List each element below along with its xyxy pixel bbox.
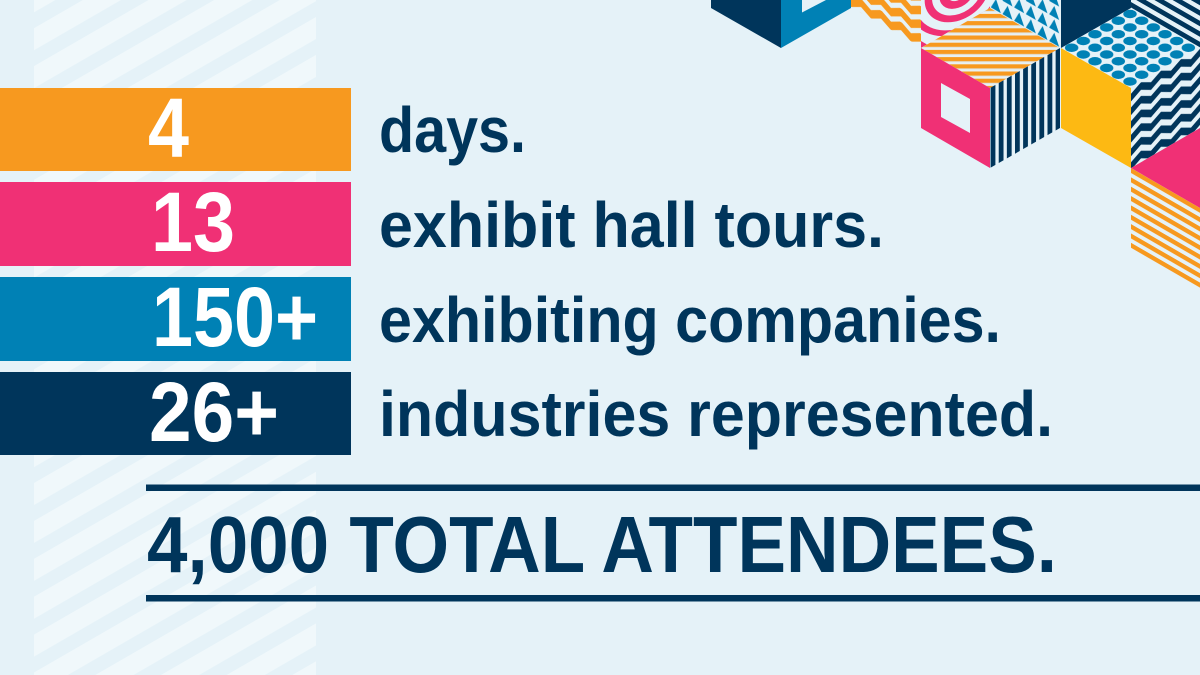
cube: blue dots, yellow and navy waves: [1061, 8, 1200, 168]
face: pink concentric rings: [921, 0, 990, 48]
label: exhibiting companies.: [379, 284, 1001, 356]
stat row: 150+ exhibiting companies: [0, 270, 1001, 364]
orange bar: [0, 88, 351, 171]
label: industries represented.: [379, 378, 1053, 450]
cube: pink, orange and navy stripes: [921, 8, 1060, 168]
number: 4: [148, 81, 189, 175]
label: exhibit hall tours.: [379, 189, 884, 261]
number: 26+: [149, 365, 279, 459]
isometric cube pattern cluster: [711, 0, 1200, 288]
stat row: 13 exhibit hall tours: [0, 175, 884, 269]
total attendees text: 4,000 TOTAL ATTENDEES.: [147, 500, 1057, 589]
cube: navy top, navy stripes: [1061, 0, 1200, 48]
stat row: 4 days: [0, 81, 526, 175]
number: 150+: [152, 270, 318, 364]
face: blue triangles: [990, 0, 1060, 48]
decorative striped column: [34, 0, 316, 675]
number: 13: [151, 175, 235, 269]
blue bar: [0, 277, 351, 361]
navy bar: [0, 372, 351, 455]
total attendees banner: [146, 484, 1200, 602]
face: orange zigzag: [851, 0, 921, 47]
stat row: 26+ industries represented: [0, 365, 1053, 459]
pink bar: [0, 182, 351, 266]
label: days.: [379, 94, 526, 166]
cube: pink and orange stripes, right edge: [1131, 128, 1200, 288]
cube: navy and blue, top left: [711, 0, 851, 48]
